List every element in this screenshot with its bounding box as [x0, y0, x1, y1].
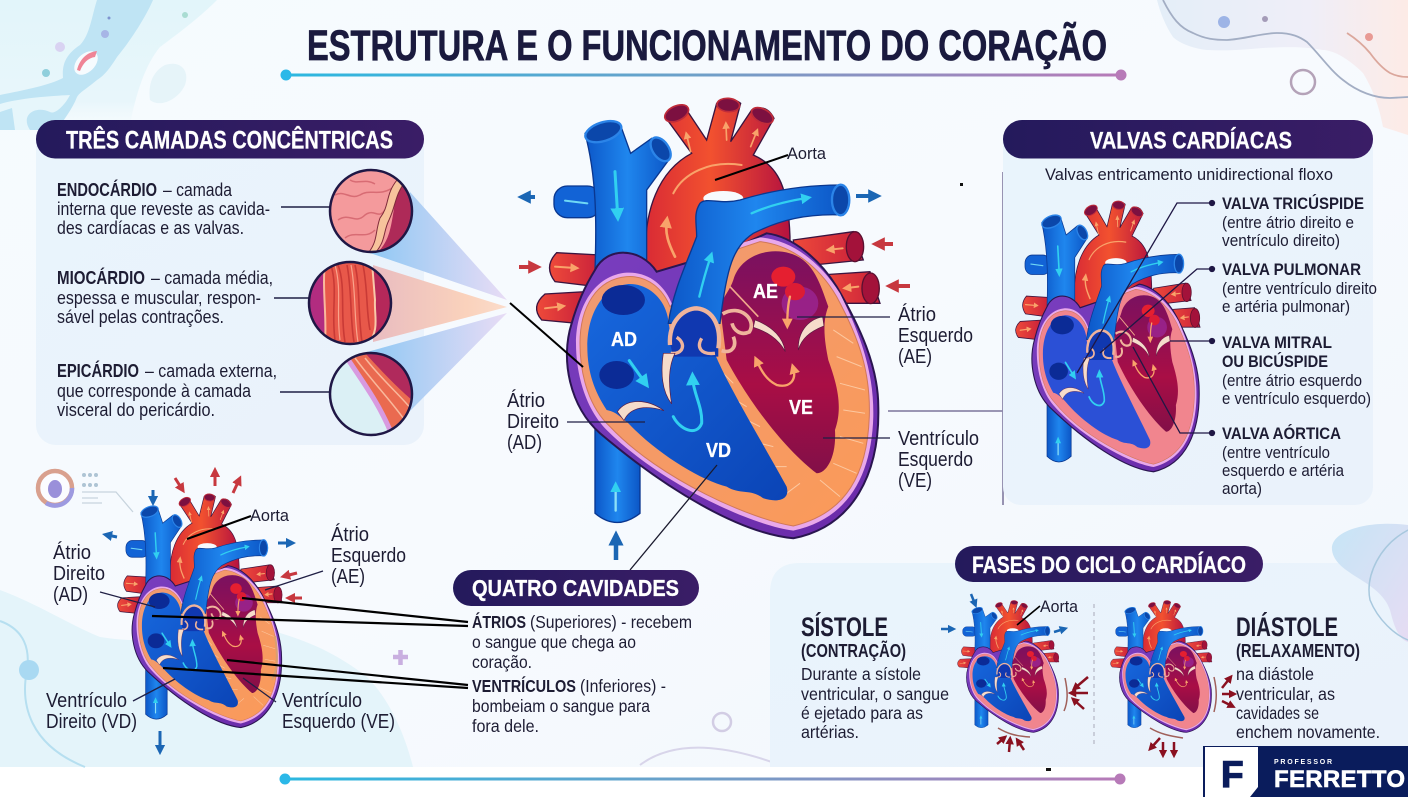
heading pill — [955, 546, 1263, 582]
heading pill: FASES DO CICLO CARDÍACO — [972, 551, 1246, 579]
text: valva tricúspide: ventrículo direito) — [1222, 231, 1340, 250]
text: valva aórtica: aorta) — [1222, 479, 1262, 498]
text: miocárdio: MIOCÁRDIO — [57, 267, 145, 288]
heading pill — [453, 570, 699, 606]
text: miocárdio: sável pelas contrações. — [57, 307, 224, 327]
text: epicárdio: visceral do pericárdio. — [57, 400, 215, 420]
text: valva aórtica: VALVA AÓRTICA — [1222, 424, 1341, 443]
main heart diagram: AD — [611, 329, 637, 351]
aorta label: Aorta — [1040, 597, 1079, 616]
text: diástole: ventricular, as — [1236, 684, 1335, 704]
text: valva pulmonar: e artéria pulmonar) — [1222, 297, 1350, 316]
label: aorta: Aorta — [250, 506, 290, 525]
text: valva aórtica — [1222, 424, 1344, 498]
text: diástole: DIÁSTOLE — [1236, 611, 1338, 642]
systole arrows — [941, 594, 1088, 752]
aorta label — [1017, 597, 1079, 625]
text: valva pulmonar — [1222, 260, 1377, 316]
systole heart — [958, 600, 1059, 732]
label: ventrículo direito — [46, 679, 175, 733]
text: miocárdio — [57, 267, 273, 327]
title: ESTRUTURA E O FUNCIONAMENTO DO CORAÇÃO — [307, 22, 1107, 70]
label: átrio direito — [507, 389, 645, 454]
text: sístole: Durante a sístole — [801, 664, 921, 684]
text: valva aórtica: (entre ventrículo — [1222, 443, 1330, 462]
main heart labels — [507, 144, 979, 492]
label: átrio esquerdo: (AE) — [331, 566, 365, 588]
logo letter: F — [1221, 754, 1244, 795]
arrows around main heart — [519, 196, 910, 560]
heading pill — [36, 120, 424, 158]
label: aorta — [715, 144, 827, 180]
valve leader lines — [1077, 200, 1214, 436]
text: ventrículos: bombeiam o sangue para — [472, 696, 650, 716]
label: ventrículo esquerdo — [823, 428, 979, 492]
small heart labels — [46, 506, 406, 733]
text: sístole: (CONTRAÇÃO) — [801, 640, 906, 661]
text: valva tricúspide: VALVA TRICÚSPIDE — [1222, 194, 1364, 213]
label: ventrículo direito: Direito (VD) — [46, 711, 137, 733]
text: valva tricúspide — [1222, 194, 1364, 250]
label: ventrículo esquerdo: Ventrículo — [282, 690, 362, 712]
text: ventrículos — [472, 675, 666, 736]
text: sístole: é ejetado para as — [801, 703, 923, 723]
text: diástole — [1236, 611, 1380, 742]
text: diástole: na diástole — [1236, 664, 1314, 684]
text: átrios: o sangue que chega ao — [472, 632, 636, 652]
text: ventrículos: (Inferiores) - — [580, 676, 666, 696]
title underline — [280, 70, 1126, 80]
label: átrio esquerdo: Átrio — [331, 523, 369, 546]
main heart diagram: VE — [789, 397, 813, 419]
diastole heart — [1111, 600, 1212, 732]
text: átrios: ÁTRIOS — [472, 611, 526, 632]
heading pill: VALVAS CARDÍACAS — [1090, 126, 1292, 154]
text: átrios: (Superiores) - recebem — [530, 612, 692, 632]
text: diástole: cavidades se — [1236, 703, 1319, 723]
cones connecting circles to heart — [367, 192, 507, 413]
mini icon: heart ring — [38, 471, 133, 512]
text: valva pulmonar: VALVA PULMONAR — [1222, 260, 1361, 279]
subtitle: Valvas entricamento unidirectional floxo — [1045, 165, 1333, 184]
label: átrio esquerdo: Esquerdo — [331, 545, 406, 567]
text: sístole: SÍSTOLE — [801, 611, 888, 642]
label: átrio esquerdo — [265, 523, 406, 590]
label: átrio esquerdo: Esquerdo — [898, 325, 973, 347]
text: sístole: artérias. — [801, 722, 859, 742]
panel: fases do ciclo cardíaco — [770, 524, 1408, 767]
main heart diagram: VD — [706, 440, 731, 462]
label: átrio esquerdo: (AE) — [898, 346, 932, 368]
panel: quatro cavidades — [453, 570, 699, 736]
icon: endocardium circle — [330, 170, 412, 252]
text: endocárdio: des cardíacas e as valvas. — [57, 218, 244, 238]
text: epicárdio: – camada externa, — [145, 361, 277, 381]
text: valva mitral: (entre átrio esquerdo — [1222, 371, 1362, 390]
text: sístole: ventricular, o sangue — [801, 684, 949, 704]
text: epicárdio: que corresponde à camada — [57, 381, 252, 401]
text: átrios — [472, 611, 692, 672]
heading pill — [1003, 120, 1373, 158]
small heart diagram — [118, 493, 282, 728]
panel: três camadas concêntricas — [36, 120, 507, 445]
text: ventrículos: fora dele. — [472, 716, 539, 736]
panel: valvas cardíacas — [1003, 120, 1377, 505]
label: aorta: Aorta — [787, 144, 827, 163]
label: átrio direito: Átrio — [507, 389, 545, 412]
text: valva mitral: OU BICÚSPIDE — [1222, 352, 1328, 371]
arrows around small heart — [107, 472, 302, 750]
heading pill: QUATRO CAVIDADES — [472, 575, 679, 601]
label: ventrículo esquerdo: Ventrículo — [898, 428, 979, 450]
heading pill: TRÊS CAMADAS CONCÊNTRICAS — [66, 124, 393, 154]
bottom rule — [280, 774, 1126, 784]
text: valva pulmonar: (entre ventrículo direito — [1222, 279, 1377, 298]
label: ventrículo esquerdo: (VE) — [898, 470, 932, 492]
main heart diagram: AE — [753, 281, 778, 303]
logo wordmark: PROFESSOR — [1274, 759, 1332, 766]
main heart diagram — [537, 97, 880, 538]
label: átrio direito: (AD) — [53, 584, 88, 606]
text: diástole: enchem novamente. — [1236, 722, 1380, 742]
text: valva mitral: VALVA MITRAL — [1222, 333, 1332, 352]
label: aorta — [187, 506, 290, 539]
label: átrio esquerdo — [797, 303, 973, 368]
label: ventrículo esquerdo — [243, 678, 395, 733]
label: ventrículo esquerdo: Esquerdo (VE) — [282, 711, 395, 733]
text: miocárdio: espessa e muscular, respon- — [57, 288, 261, 308]
text: valva tricúspide: (entre átrio direito e — [1222, 213, 1354, 232]
text: endocárdio: ENDOCÁRDIO — [57, 179, 157, 200]
text: miocárdio: – camada média, — [151, 268, 273, 288]
label: átrio esquerdo: Átrio — [898, 303, 936, 326]
logo: professor ferretto — [1203, 746, 1408, 797]
diastole arrows — [1150, 677, 1233, 754]
icon: myocardium circle — [309, 262, 391, 344]
label: átrio direito: Direito — [507, 411, 559, 433]
label: átrio direito — [53, 541, 155, 607]
text: endocárdio: – camada — [163, 180, 233, 200]
text: valva mitral: e ventrículo esquerdo) — [1222, 389, 1371, 408]
text: epicárdio: EPICÁRDIO — [57, 360, 139, 381]
text: sístole — [801, 611, 949, 742]
label: átrio direito: (AD) — [507, 432, 542, 454]
corner blob — [1332, 524, 1408, 642]
text: endocárdio — [57, 179, 270, 238]
label: átrio direito: Direito — [53, 563, 105, 585]
label: ventrículo direito: Ventrículo — [46, 690, 127, 712]
text: valva aórtica: esquerdo e artéria — [1222, 461, 1344, 480]
icon: epicardium circle — [330, 353, 412, 435]
logo wordmark: FERRETTO — [1274, 766, 1405, 793]
valve heart — [1016, 201, 1200, 472]
text: diástole: (RELAXAMENTO) — [1236, 641, 1360, 661]
text: endocárdio: interna que reveste as cavida- — [57, 199, 270, 219]
text: átrios: coração. — [472, 652, 532, 672]
label: átrio direito: Átrio — [53, 541, 91, 564]
label: ventrículo esquerdo: Esquerdo — [898, 449, 973, 471]
text: valva mitral — [1222, 333, 1371, 408]
connector lines to quatro cavidades — [152, 598, 468, 688]
text: epicárdio — [57, 360, 277, 420]
text: ventrículos: VENTRÍCULOS — [472, 675, 576, 696]
